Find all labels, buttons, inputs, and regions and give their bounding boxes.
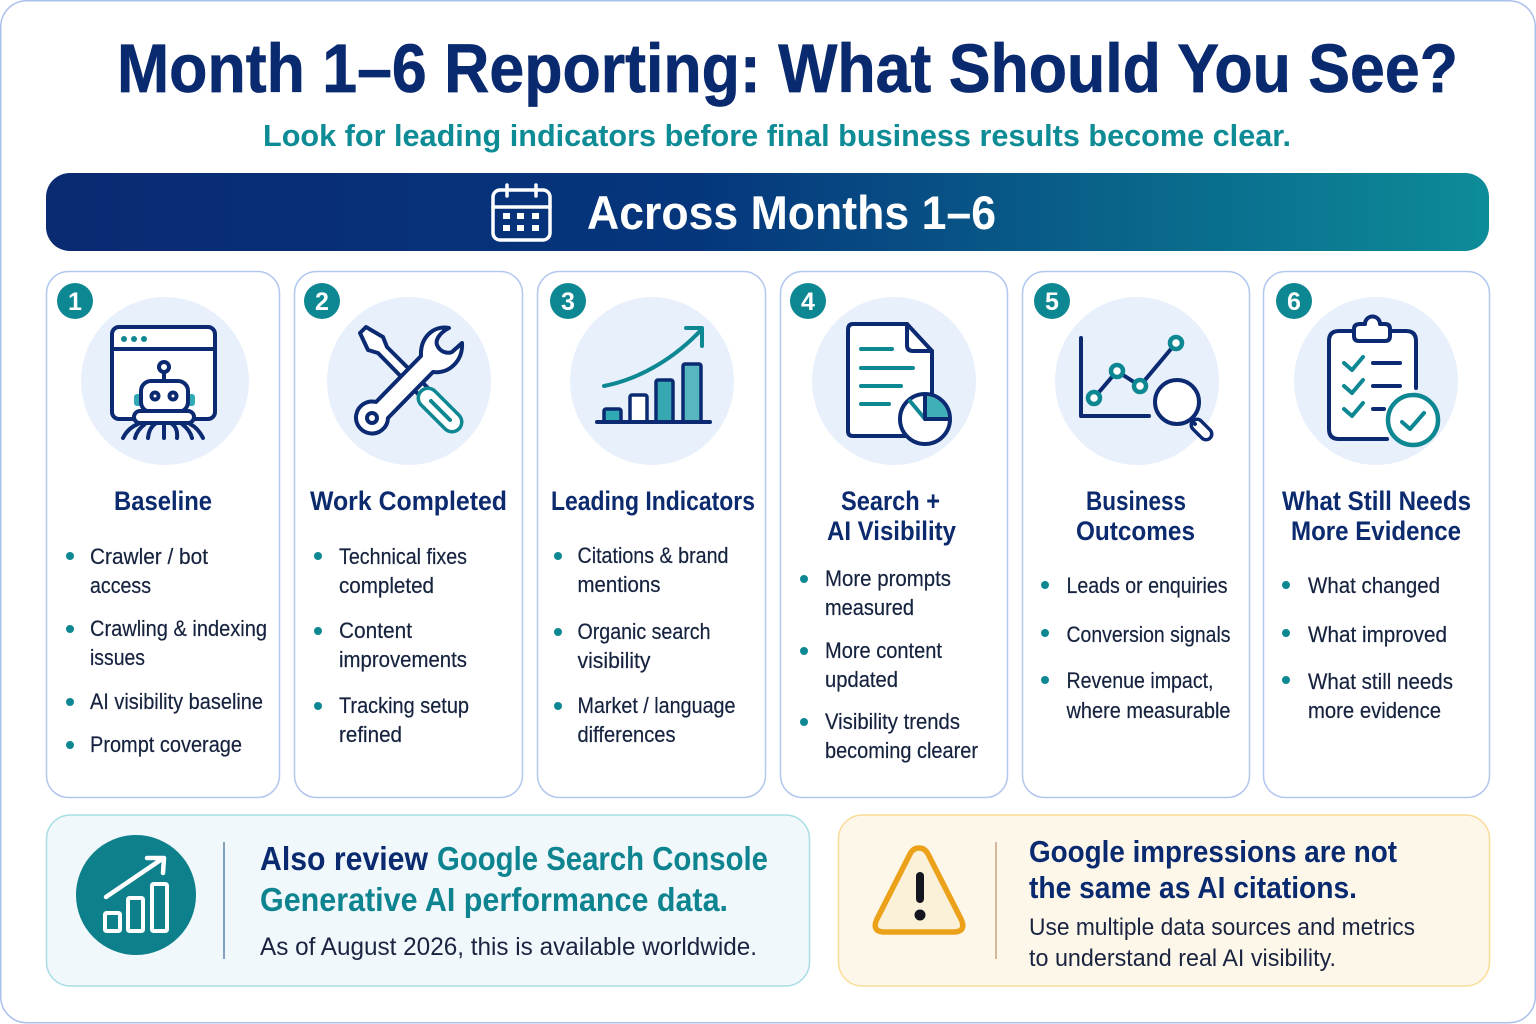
bullet list: Market / language xyxy=(578,693,736,718)
bullet list xyxy=(1282,573,1453,723)
heading: AI Visibility xyxy=(827,516,956,546)
bullet list: Tracking setup xyxy=(339,693,469,718)
bullet list: refined xyxy=(339,722,402,747)
icon: line chart with magnifier xyxy=(1055,297,1219,465)
warning heading: the same as AI citations. xyxy=(1029,870,1357,905)
panel: 6 what still needs more evidence xyxy=(1264,272,1490,798)
bullet list xyxy=(1041,573,1230,723)
icon: calendar xyxy=(493,185,550,240)
icon: warning triangle xyxy=(875,848,963,932)
warning note: to understand real AI visibility. xyxy=(1029,945,1336,972)
bullet list: What still needs xyxy=(1308,669,1453,694)
bullet list: AI visibility baseline xyxy=(90,689,263,714)
badge 5: 5 xyxy=(1045,288,1059,316)
icon: rising bar chart xyxy=(570,297,734,465)
heading: More Evidence xyxy=(1291,516,1461,546)
bullet list xyxy=(314,544,469,747)
heading: What Still Needs xyxy=(1282,486,1471,516)
bullet list: issues xyxy=(90,645,145,670)
panel: 2 work completed xyxy=(294,272,522,798)
bullet list: Crawling & indexing xyxy=(90,616,267,641)
icon: growth chart in teal circle xyxy=(76,835,196,955)
warning heading: Google impressions are not xyxy=(1029,834,1397,869)
badge 1 xyxy=(57,283,93,319)
bullet list: more evidence xyxy=(1308,698,1441,723)
heading: Work Completed xyxy=(310,486,507,516)
callout heading: Also review xyxy=(260,840,428,877)
badge 6 xyxy=(1276,283,1312,319)
banner: across months 1-6 xyxy=(46,173,1489,251)
badge 2 xyxy=(304,283,340,319)
bullet list: Content xyxy=(339,618,412,643)
bullet list: Leads or enquiries xyxy=(1066,573,1228,598)
bullet list: visibility xyxy=(578,648,650,673)
badge 3: 3 xyxy=(561,288,575,316)
bullet list xyxy=(800,566,978,763)
heading xyxy=(1282,486,1471,546)
badge 4 xyxy=(790,283,826,319)
heading: Outcomes xyxy=(1076,516,1195,546)
heading: Leading Indicators xyxy=(551,486,755,516)
bullet list: Visibility trends xyxy=(825,709,960,734)
icon: clipboard checklist xyxy=(1294,297,1458,465)
bullet list: where measurable xyxy=(1066,698,1230,723)
badge 4: 4 xyxy=(801,288,815,316)
heading: Search + xyxy=(841,486,940,516)
heading: Business xyxy=(1086,486,1186,516)
heading xyxy=(1076,486,1195,546)
bullet list: updated xyxy=(825,667,898,692)
icon: robot crawler in browser window xyxy=(81,297,249,465)
callout heading xyxy=(260,840,768,918)
callout heading: Generative AI performance data. xyxy=(260,881,728,918)
callout note: As of August 2026, this is available worldwide. xyxy=(260,933,757,961)
warning note: Use multiple data sources and metrics xyxy=(1029,914,1415,941)
callout: google search console xyxy=(46,815,810,986)
callout: warning about impressions xyxy=(838,815,1490,986)
panel: 3 leading indicators xyxy=(538,272,766,798)
bullet list: What changed xyxy=(1308,573,1440,598)
badge 5 xyxy=(1034,283,1070,319)
panel: 1 baseline xyxy=(46,272,280,798)
bullet list: completed xyxy=(339,573,434,598)
bullet list: measured xyxy=(825,595,914,620)
bullet list: Organic search xyxy=(578,619,710,644)
callout heading: Google Search Console xyxy=(437,840,768,877)
warning note xyxy=(1029,914,1415,972)
bullet list: More prompts xyxy=(825,566,951,591)
bullet list: access xyxy=(90,573,151,598)
bullet list: becoming clearer xyxy=(825,738,978,763)
bullet list: What improved xyxy=(1308,622,1447,647)
heading: Baseline xyxy=(114,486,212,516)
badge 3 xyxy=(550,283,586,319)
bullet list: differences xyxy=(578,722,676,747)
bullet list: Citations & brand xyxy=(578,543,728,568)
bullet list: mentions xyxy=(578,572,660,597)
heading xyxy=(827,486,956,546)
subtitle: Look for leading indicators before final business results become clear. xyxy=(263,118,1291,153)
bullet list xyxy=(554,543,736,747)
badge 6: 6 xyxy=(1287,288,1301,316)
panel: 4 search + AI visibility xyxy=(780,272,1008,798)
bullet list: Technical fixes xyxy=(339,544,467,569)
icon: document with pie chart xyxy=(812,297,976,465)
bullet list: Prompt coverage xyxy=(90,732,242,757)
bullet list: Revenue impact, xyxy=(1066,668,1214,693)
icon: wrench and screwdriver xyxy=(327,297,491,465)
bullet list: Conversion signals xyxy=(1066,622,1230,647)
bullet list: Crawler / bot xyxy=(90,544,208,569)
badge 1: 1 xyxy=(68,288,82,316)
bullet list xyxy=(66,544,267,757)
warning heading xyxy=(1029,834,1397,905)
panel: 5 business outcomes xyxy=(1022,272,1250,798)
badge 2: 2 xyxy=(315,288,329,316)
banner text: Across Months 1–6 xyxy=(587,186,996,239)
bullet list: improvements xyxy=(339,647,467,672)
bullet list: More content xyxy=(825,638,942,663)
